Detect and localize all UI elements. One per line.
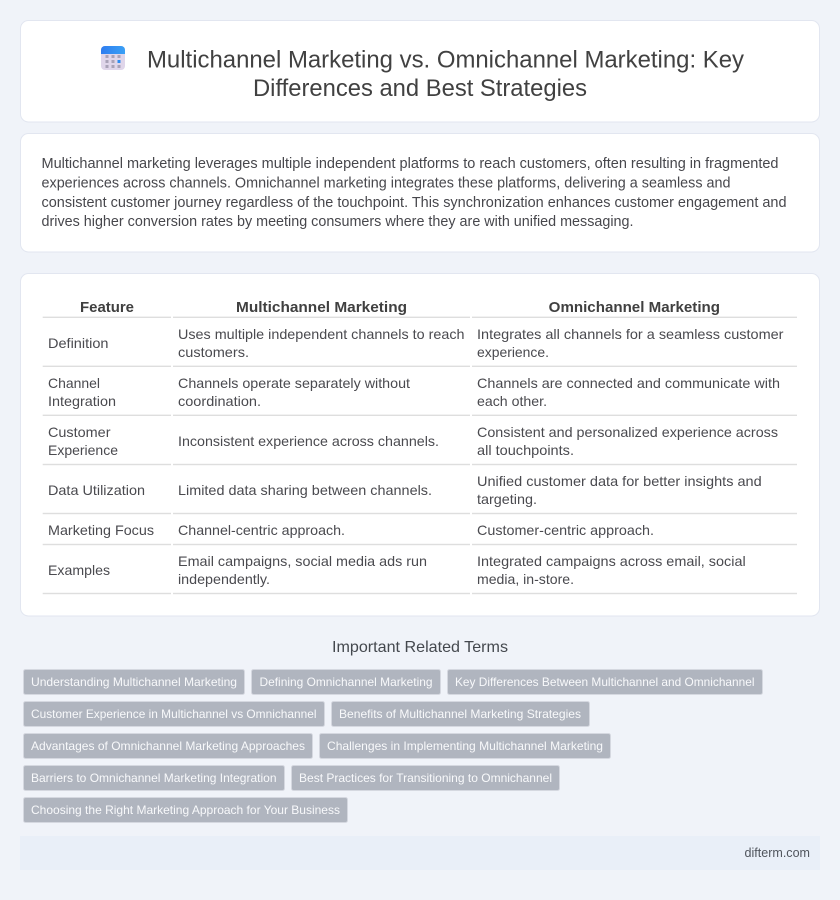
tag bbox=[320, 734, 610, 758]
row: marketing focus: Marketing Focus bbox=[48, 522, 154, 538]
tag: Best Practices for Transitioning to Omnichannel bbox=[299, 771, 552, 785]
panel: introduction text: drives higher conversion rates by meeting consumers where they are with unified messaging. bbox=[42, 214, 634, 230]
table header row bbox=[80, 299, 720, 316]
row: channel integration: Channels operate separately without bbox=[178, 375, 410, 391]
tag: Advantages of Omnichannel Marketing Approaches bbox=[31, 739, 305, 753]
row: definition: Integrates all channels for a seamless customer bbox=[477, 326, 784, 342]
row: definition: Uses multiple independent channels to reach bbox=[178, 326, 465, 342]
row: customer experience: Experience bbox=[48, 442, 118, 458]
tag: Benefits of Multichannel Marketing Strategies bbox=[339, 707, 581, 721]
tag bbox=[24, 670, 244, 694]
row: customer experience: Inconsistent experience across channels. bbox=[178, 433, 439, 449]
panel: introduction text bbox=[20, 134, 820, 252]
row: data utilization: Unified customer data for better insights and bbox=[477, 473, 762, 489]
tag bbox=[252, 670, 440, 694]
row: marketing focus: Channel-centric approach. bbox=[178, 522, 345, 538]
row: marketing focus bbox=[48, 522, 654, 538]
row: channel integration: Channel bbox=[48, 375, 100, 391]
row: definition: customers. bbox=[178, 344, 249, 360]
row: data utilization bbox=[48, 473, 762, 507]
row: examples: Integrated campaigns across email, social bbox=[477, 553, 746, 569]
table header row: Omnichannel Marketing bbox=[549, 299, 720, 316]
panel: comparison table bbox=[20, 274, 820, 616]
row: customer experience bbox=[48, 424, 778, 458]
title bbox=[147, 46, 745, 102]
tag: Challenges in Implementing Multichannel Marketing bbox=[327, 739, 603, 753]
row: channel integration bbox=[48, 375, 780, 409]
row: channel integration: Integration bbox=[48, 393, 116, 409]
row: definition: experience. bbox=[477, 344, 549, 360]
heading: important related terms: Important Related Terms bbox=[332, 639, 508, 656]
row: data utilization: Limited data sharing between channels. bbox=[178, 482, 432, 498]
row: data utilization: targeting. bbox=[477, 491, 537, 507]
related term tags bbox=[24, 670, 762, 822]
tag: Understanding Multichannel Marketing bbox=[31, 675, 237, 689]
tag: Customer Experience in Multichannel vs Omnichannel bbox=[31, 707, 316, 721]
row: examples bbox=[48, 553, 746, 587]
title: Multichannel Marketing vs. Omnichannel Marketing: Key bbox=[147, 46, 745, 74]
tag: Defining Omnichannel Marketing bbox=[260, 675, 432, 689]
row: definition: Definition bbox=[48, 335, 108, 351]
row: customer experience: Consistent and personalized experience across bbox=[477, 424, 778, 440]
table header row: Multichannel Marketing bbox=[236, 299, 407, 316]
row: examples: Examples bbox=[48, 562, 110, 578]
row: customer experience: all touchpoints. bbox=[477, 442, 574, 458]
row: customer experience: Customer bbox=[48, 424, 111, 440]
panel: introduction text: Multichannel marketing leverages multiple independent platforms to reach customers, often resulting in fragmented bbox=[42, 156, 779, 172]
row: definition bbox=[48, 326, 784, 360]
row: examples: media, in-store. bbox=[477, 571, 574, 587]
panel: introduction text: consistent customer journey regardless of the touchpoint. This synchronization enhances customer engagement and bbox=[42, 195, 787, 211]
icon: calendar bbox=[101, 46, 125, 70]
tag: Choosing the Right Marketing Approach for Your Business bbox=[31, 803, 340, 817]
row: marketing focus: Customer-centric approach. bbox=[477, 522, 654, 538]
footer bar bbox=[20, 836, 820, 870]
tag bbox=[24, 798, 348, 822]
title: Differences and Best Strategies bbox=[253, 75, 587, 102]
table header row: Feature bbox=[80, 299, 134, 316]
row: examples: independently. bbox=[178, 571, 270, 587]
panel: introduction text: experiences across channels. Omnichannel marketing integrates these platforms, delivering a seamless and bbox=[42, 176, 731, 192]
row: channel integration: Channels are connected and communicate with bbox=[477, 375, 780, 391]
tag bbox=[24, 766, 284, 790]
tag: Barriers to Omnichannel Marketing Integration bbox=[31, 771, 276, 785]
tag bbox=[332, 702, 590, 726]
tag bbox=[292, 766, 560, 790]
tag: Key Differences Between Multichannel and Omnichannel bbox=[455, 675, 754, 689]
tag bbox=[448, 670, 762, 694]
panel: title header bbox=[20, 20, 820, 122]
row: examples: Email campaigns, social media ads run bbox=[178, 553, 427, 569]
row: channel integration: coordination. bbox=[178, 393, 261, 409]
footer bar: difterm.com bbox=[744, 846, 810, 860]
tag bbox=[24, 702, 324, 726]
row: data utilization: Data Utilization bbox=[48, 482, 145, 498]
tag bbox=[24, 734, 312, 758]
row: channel integration: each other. bbox=[477, 393, 547, 409]
